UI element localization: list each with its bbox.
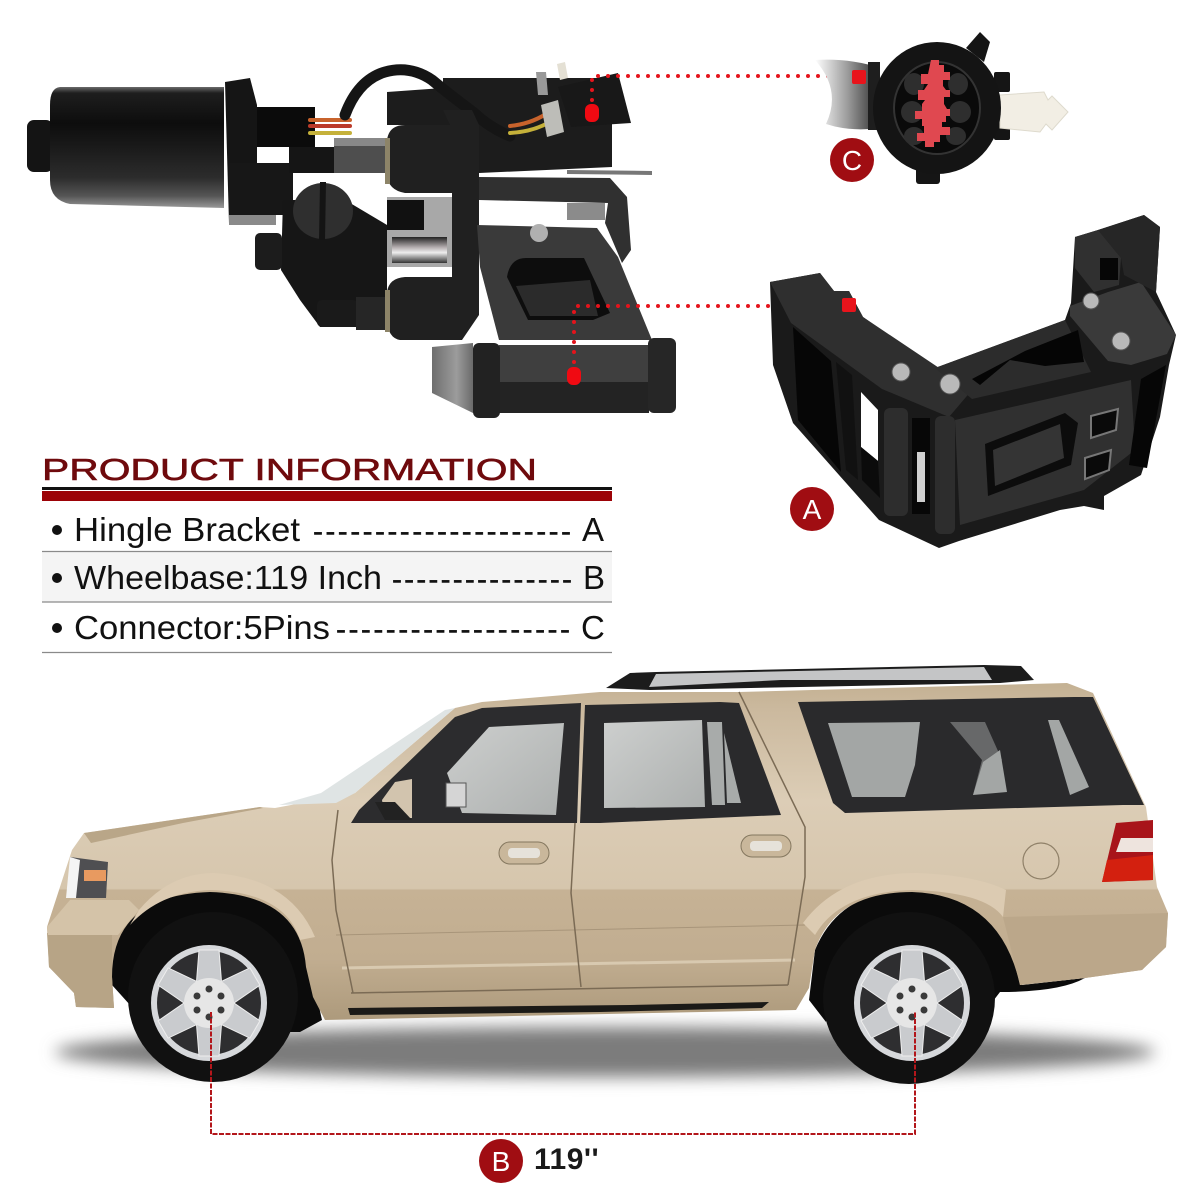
side mirror — [375, 779, 466, 820]
leader C: connector callout — [585, 76, 858, 122]
spec row: wheelbase: B — [583, 559, 605, 596]
running board — [348, 1002, 769, 1015]
upper right plate — [1070, 282, 1176, 365]
spec row band — [42, 552, 612, 602]
tail light — [1102, 820, 1153, 882]
red pins highlight — [915, 60, 950, 147]
bolts — [892, 293, 1130, 394]
fuel door — [1023, 843, 1059, 879]
square marker C — [852, 70, 866, 84]
badge B with wheelbase measurement: B — [492, 1146, 510, 1177]
badge B with wheelbase measurement: 119'' — [534, 1143, 599, 1176]
front bumper — [47, 933, 114, 1008]
detail photo C: connector — [815, 32, 1068, 184]
spec row: wheelbase: Wheelbase:119 Inch — [74, 559, 382, 596]
door outlines — [332, 692, 805, 993]
spec row: connector: ------------------- — [336, 613, 570, 646]
spec row: hinge bracket — [52, 511, 604, 548]
spec row: connector — [52, 609, 605, 646]
arm with bosses — [385, 110, 479, 340]
spec row: hinge bracket: A — [582, 511, 604, 548]
spec row: hinge bracket: --------------------- — [313, 515, 571, 548]
electrical connector — [536, 62, 631, 137]
heading: product information: PRODUCT INFORMATION — [42, 452, 537, 487]
badge C: C — [842, 145, 862, 176]
left arm top — [770, 273, 972, 417]
top hinge — [1098, 215, 1160, 292]
spec row: wheelbase — [52, 559, 605, 596]
square marker A — [842, 298, 856, 312]
product photo: liftgate motor assembly — [27, 62, 676, 418]
head light — [66, 857, 108, 898]
hood strip — [84, 807, 263, 843]
vehicle: tan SUV — [47, 665, 1168, 1084]
lower plate arm — [479, 177, 631, 263]
front door window — [351, 703, 581, 823]
front wheel — [128, 912, 298, 1082]
badge B with wheelbase measurement — [479, 1139, 599, 1183]
hinge arm bracket — [432, 224, 676, 418]
body shell — [47, 683, 1168, 1020]
wiring harness — [310, 70, 546, 136]
badge C — [830, 138, 874, 182]
ground shadow — [55, 1027, 1155, 1077]
gear housing — [255, 138, 454, 330]
badge A — [790, 487, 834, 531]
roof rack — [606, 665, 1034, 690]
rear mounting plate — [387, 78, 612, 173]
screw clip — [1000, 92, 1068, 132]
door creases — [336, 925, 805, 935]
spec row: connector: Connector:5Pins — [74, 609, 330, 646]
door handles — [499, 835, 791, 864]
upper centre — [935, 320, 1091, 399]
wheelbase dimension line — [211, 1012, 915, 1134]
motor housing — [27, 78, 315, 225]
leader A: bracket callout — [567, 306, 845, 385]
spec row: hinge bracket: Hingle Bracket — [74, 511, 300, 548]
middle door window — [580, 702, 781, 823]
spec row: wheelbase: --------------- — [392, 563, 572, 596]
rear bumper — [1003, 913, 1168, 985]
wheel arch flares — [130, 873, 315, 940]
badge A: A — [803, 494, 822, 525]
rear side window — [798, 697, 1144, 813]
wheel well shadows — [112, 890, 322, 1032]
front plate — [955, 380, 1135, 525]
detail photo A: hinge bracket — [770, 215, 1176, 548]
heading: product information — [42, 452, 612, 501]
windshield — [279, 708, 455, 805]
rear wheel — [823, 912, 995, 1084]
spec row: connector: C — [581, 609, 605, 646]
